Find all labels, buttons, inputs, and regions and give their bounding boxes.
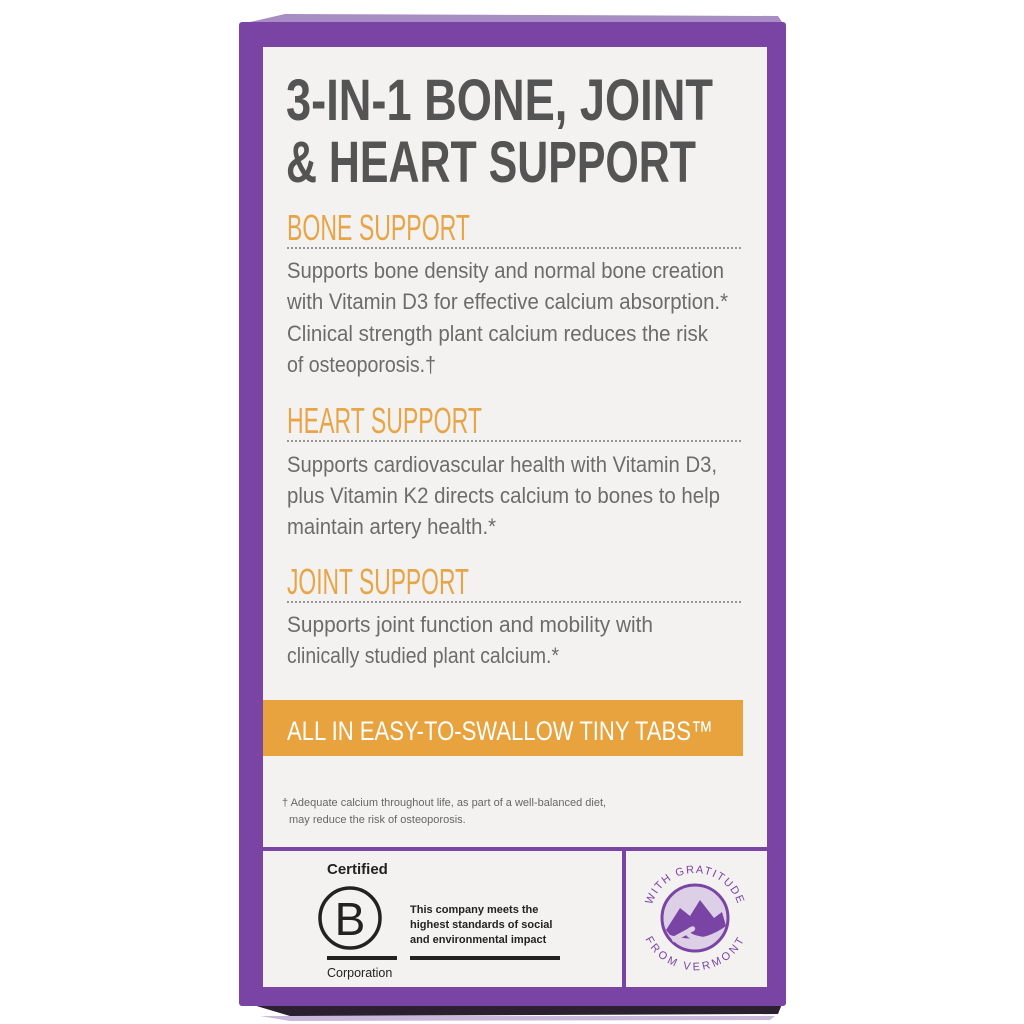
icon: certified b corporation: Certified bbox=[327, 861, 388, 878]
panel: vermont logo: FROM VERMONT bbox=[646, 936, 743, 970]
text: b corp statement bbox=[410, 904, 560, 960]
section: bone support: Supports bone density and normal bone creation bbox=[287, 258, 724, 283]
purple box bbox=[239, 22, 786, 1006]
panel: main white bbox=[263, 47, 767, 847]
title: & HEART SUPPORT bbox=[286, 130, 696, 195]
icon: certified b corporation: B bbox=[335, 893, 365, 945]
section: heart support: plus Vitamin K2 directs calcium to bones to help bbox=[287, 483, 720, 508]
text: b corp statement: and environmental impact bbox=[410, 934, 547, 946]
title bbox=[286, 68, 713, 195]
section: joint support: JOINT SUPPORT bbox=[287, 561, 469, 602]
icon: certified b corporation: Corporation bbox=[327, 966, 392, 980]
panel: vermont logo: WITH GRATITUDE bbox=[644, 866, 744, 904]
icon: certified b corporation bbox=[320, 861, 397, 980]
panel: b corp bbox=[263, 851, 622, 987]
section: joint support: Supports joint function and mobility with bbox=[287, 612, 653, 637]
footnote bbox=[282, 797, 606, 826]
text: b corp statement: This company meets the bbox=[410, 904, 538, 916]
banner: tiny tabs: ALL IN EASY-TO-SWALLOW TINY TABS™ bbox=[287, 716, 713, 746]
box edges bbox=[250, 14, 782, 1021]
text: b corp statement: highest standards of social bbox=[410, 919, 552, 931]
footnote: † Adequate calcium throughout life, as part of a well-balanced diet, bbox=[282, 797, 606, 809]
section: heart support: HEART SUPPORT bbox=[287, 400, 482, 441]
banner: tiny tabs bbox=[263, 700, 743, 756]
panel: vermont logo bbox=[626, 851, 767, 987]
title: 3-IN-1 BONE, JOINT bbox=[286, 68, 713, 133]
section: bone support bbox=[286, 207, 743, 377]
section: bone support: Clinical strength plant calcium reduces the risk bbox=[287, 321, 709, 346]
section: joint support: clinically studied plant calcium.* bbox=[287, 643, 559, 668]
section: bone support: of osteoporosis.† bbox=[287, 352, 436, 377]
section: heart support: maintain artery health.* bbox=[287, 514, 496, 539]
section: bone support: with Vitamin D3 for effective calcium absorption.* bbox=[286, 289, 728, 314]
section: heart support bbox=[287, 400, 743, 539]
section: joint support bbox=[287, 561, 743, 668]
section: heart support: Supports cardiovascular health with Vitamin D3, bbox=[287, 452, 717, 477]
section: bone support: BONE SUPPORT bbox=[287, 207, 470, 248]
footnote: may reduce the risk of osteoporosis. bbox=[289, 814, 466, 826]
